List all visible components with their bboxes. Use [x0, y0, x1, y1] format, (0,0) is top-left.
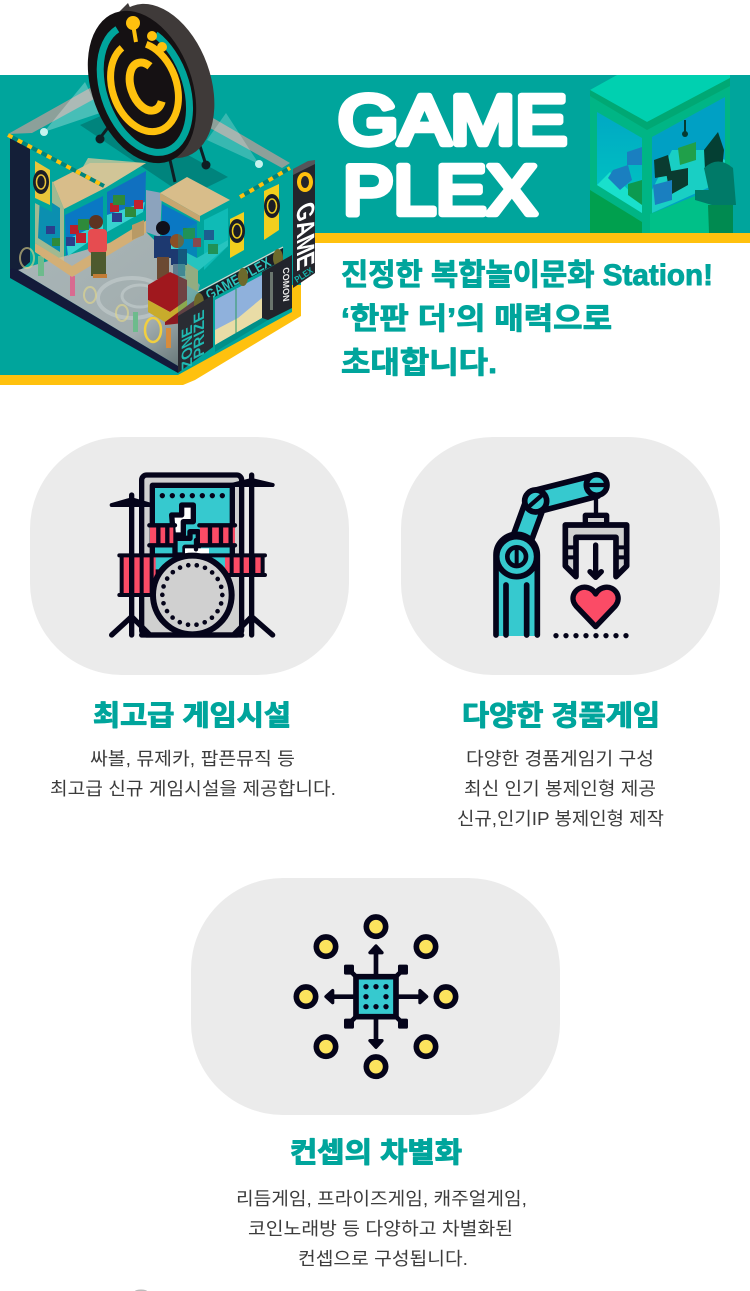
icon: drum kit	[112, 475, 273, 635]
comon panel: COMON	[281, 266, 291, 302]
panel: differentiated concept	[191, 878, 560, 1269]
description: 최고급 신규 게임시설을 제공합니다.	[50, 779, 336, 799]
person in red	[88, 215, 107, 278]
claw machine illustration top right	[590, 75, 736, 233]
description: 컨셉으로 구성됩니다.	[298, 1249, 468, 1269]
heading: 컨셉의 차별화	[290, 1137, 462, 1168]
prize zone panel	[178, 295, 213, 373]
prize zone panel: PRIZE	[192, 307, 208, 361]
vertical game sign: GAME	[291, 197, 320, 275]
hero banner background	[0, 75, 750, 385]
small mark at bottom edge	[135, 1290, 147, 1291]
subtitle: 초대합니다.	[341, 347, 497, 380]
description	[50, 749, 336, 799]
storefront	[178, 170, 293, 373]
subtitle: ‘한판 더’의 매력으로	[341, 303, 612, 336]
heading: 다양한 경품게임	[462, 700, 660, 731]
vertical game sign: PLEX	[293, 265, 315, 285]
title: GAME PLEX: PLEX	[343, 151, 537, 229]
left dark wall and floor	[10, 137, 200, 373]
vertical game sign	[291, 160, 320, 288]
panel: various prize games	[401, 437, 720, 829]
person with brown hair	[170, 234, 187, 276]
kiosk	[146, 190, 162, 237]
comon panel	[262, 255, 292, 320]
person with navy vest	[154, 221, 171, 279]
description: 리듬게임, 프라이즈게임, 캐주얼게임,	[236, 1189, 527, 1209]
title: GAME PLEX: GAME	[338, 81, 567, 159]
roof frame	[8, 82, 290, 197]
description: 신규,인기IP 봉제인형 제작	[457, 809, 664, 829]
claw machine right	[160, 177, 230, 292]
icon: central hub with arrows	[296, 917, 456, 1076]
icon: robot claw and heart	[496, 475, 629, 638]
claw machines left	[35, 158, 147, 277]
title: GAME PLEX	[338, 81, 567, 229]
subtitle	[341, 259, 713, 380]
sign legs	[97, 125, 209, 182]
awning stripes	[8, 135, 290, 197]
subtitle: 진정한 복합놀이문화 Station!	[341, 259, 713, 292]
circular logo sign	[68, 0, 234, 178]
storefront: GAME PLEX	[203, 253, 274, 303]
prize zone panel: ZONE	[180, 322, 196, 372]
description: 싸볼, 뮤제카, 팝픈뮤직 등	[90, 749, 295, 769]
panel: top-class game facilities	[30, 437, 349, 799]
description	[236, 1189, 527, 1269]
description: 다양한 경품게임기 구성	[466, 749, 654, 769]
description: 코인노래방 등 다양하고 차별화된	[248, 1219, 513, 1239]
description	[457, 749, 664, 829]
heading: 최고급 게임시설	[93, 700, 291, 731]
description: 최신 인기 봉제인형 제공	[464, 779, 656, 799]
wall posters	[33, 158, 281, 267]
red crate	[148, 272, 195, 325]
hero illustration: isometric game plex store	[8, 0, 320, 373]
